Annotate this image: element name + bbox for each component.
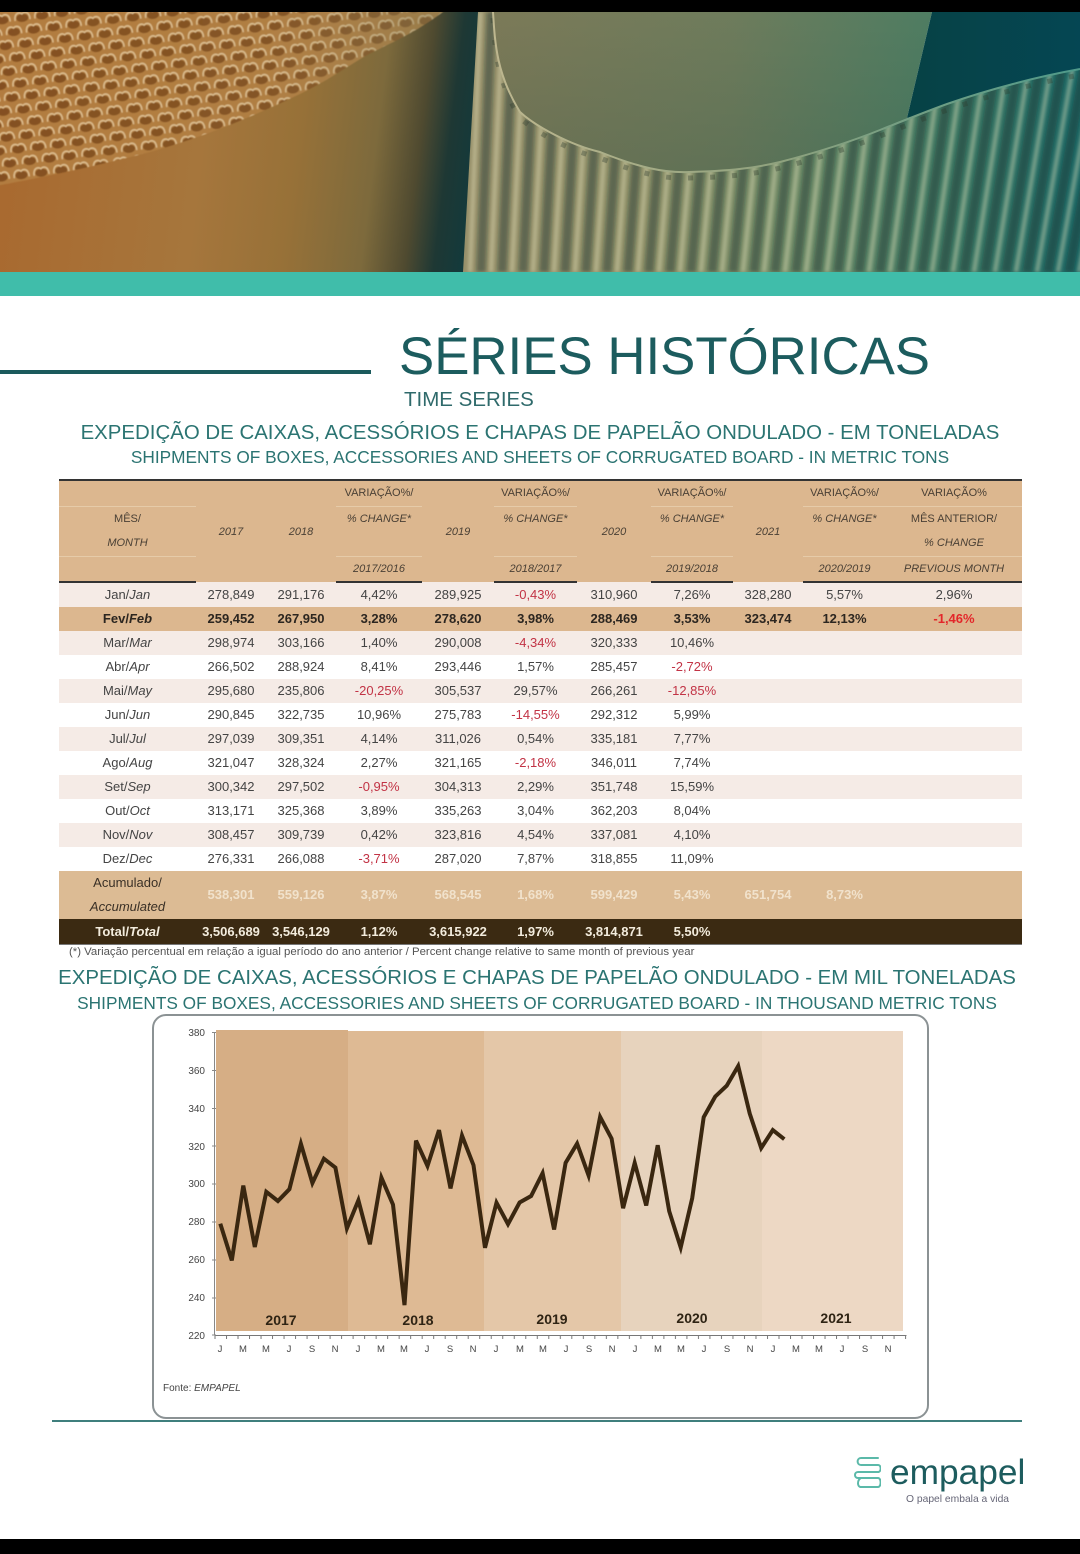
row: June: 292,312: [590, 707, 638, 722]
row: December: 287,020: [434, 851, 482, 866]
data table: VARIAÇÃO%/: [658, 487, 726, 499]
x axis labels: M: [400, 1344, 408, 1355]
row: May: 235,806: [278, 683, 324, 698]
footer rule: [52, 1420, 1022, 1422]
row: September: 15,59%: [670, 779, 714, 794]
title: SÉRIES HISTÓRICAS: [399, 327, 930, 386]
data table: [59, 479, 1022, 945]
x axis labels: M: [516, 1344, 524, 1355]
data table: MONTH: [107, 537, 148, 549]
data table: 2020: [602, 526, 626, 538]
row: October: [105, 803, 710, 818]
row: accumulated: Acumulado/: [93, 875, 162, 890]
y axis labels: 320: [188, 1142, 205, 1153]
row: July: 0,54%: [517, 731, 554, 746]
row: August: -2,18%: [515, 755, 556, 770]
x axis labels: S: [447, 1344, 453, 1355]
flute edge: [493, 12, 1080, 172]
data table: MÊS ANTERIOR/: [911, 513, 997, 525]
row: November: 0,42%: [361, 827, 397, 842]
row: May: 29,57%: [513, 683, 558, 698]
row: June: 290,845: [208, 707, 254, 722]
row: August: 7,74%: [674, 755, 710, 770]
row: July: 4,14%: [361, 731, 397, 746]
row: February highlighted: Fev/Feb: [103, 611, 152, 626]
row: accumulated: 5,43%: [674, 887, 710, 902]
data table: % CHANGE*: [347, 513, 411, 525]
row: September: 2,29%: [517, 779, 554, 794]
x axis labels: M: [239, 1344, 247, 1355]
data table: VARIAÇÃO%: [921, 487, 987, 499]
row: April: 1,57%: [517, 659, 554, 674]
row: May: 266,261: [590, 683, 638, 698]
x axis labels: N: [609, 1344, 616, 1355]
data line: [220, 1066, 784, 1305]
row: March: 320,333: [590, 635, 638, 650]
row: January: Jan/Jan: [105, 587, 150, 602]
left cardboard roll: [0, 12, 482, 272]
x axis labels: J: [564, 1344, 569, 1355]
row: October: Out/Oct: [105, 803, 150, 818]
row: January: 289,925: [434, 586, 482, 602]
row: December: Dez/Dec: [103, 851, 152, 866]
row: December: 276,331: [208, 851, 254, 866]
row: June: 322,735: [278, 707, 324, 722]
row: July: 297,039: [208, 731, 254, 746]
year labels: 2017: [265, 1312, 297, 1328]
chart frame: [152, 1014, 929, 1419]
row: September: Set/Sep: [104, 779, 151, 794]
data table: 2019/2018: [666, 563, 718, 575]
row: total: 1,97%: [517, 924, 554, 938]
data table: % CHANGE*: [660, 513, 724, 525]
row: May: 305,537: [434, 683, 482, 698]
row: accumulated: 8,73%: [826, 887, 863, 902]
logo tagline: O papel embala a vida: [906, 1494, 1009, 1505]
row: November: 309,739: [278, 827, 324, 842]
row: October: 313,171: [208, 803, 254, 818]
olive inner board: [470, 12, 1080, 272]
row: June: 5,99%: [674, 707, 710, 722]
row: February highlighted: 3,98%: [517, 611, 554, 626]
top black bar: [0, 0, 1080, 12]
row: October: 8,04%: [674, 803, 710, 818]
flute notches: [493, 18, 1080, 178]
year labels: 2020: [676, 1310, 708, 1326]
x axis labels: J: [771, 1344, 776, 1355]
row: September: -0,95%: [358, 779, 400, 794]
dark teal backdrop: [907, 12, 1080, 118]
x axis labels: J: [494, 1344, 499, 1355]
header photo: corrugated cardboard: [0, 12, 1080, 272]
row: March: 298,974: [208, 635, 254, 650]
x axis labels: M: [377, 1344, 385, 1355]
row: November: 4,10%: [674, 827, 710, 842]
row: March: 290,008: [434, 635, 482, 650]
row: January: 278,849: [208, 586, 254, 602]
x axis labels: J: [840, 1344, 845, 1355]
row: August: [102, 755, 710, 770]
data table: VARIAÇÃO%/: [810, 487, 879, 499]
row: November: 308,457: [208, 827, 254, 842]
row: August: 321,165: [434, 755, 482, 770]
data table: 2017: [219, 526, 243, 538]
row: February highlighted: 323,474: [744, 611, 792, 626]
x axis labels: M: [677, 1344, 685, 1355]
row: November: 323,816: [434, 827, 482, 842]
x axis labels: N: [470, 1344, 477, 1355]
data table: PREVIOUS MONTH: [904, 563, 1004, 575]
row: January: 310,960: [590, 586, 638, 602]
row: June: -14,55%: [511, 707, 560, 722]
row: January: 4,42%: [361, 587, 397, 602]
row: accumulated: 538,301: [208, 887, 254, 902]
row: October: 335,263: [434, 803, 482, 818]
row: June: Jun/Jun: [105, 707, 150, 722]
row: February highlighted: 3,28%: [361, 611, 397, 626]
row: total: 3,814,871: [585, 924, 643, 938]
x axis labels: M: [792, 1344, 800, 1355]
axes: [212, 1032, 906, 1339]
corrugated flutes: [460, 12, 1080, 272]
x axis labels: M: [262, 1344, 270, 1355]
data table: % CHANGE*: [503, 513, 568, 525]
bottom black bar: [0, 1539, 1080, 1554]
row: February highlighted: 267,950: [278, 611, 324, 626]
x axis labels: [218, 1344, 892, 1355]
flute shadows: [481, 12, 1080, 272]
row: May: 295,680: [208, 683, 254, 698]
y axis labels: 300: [188, 1179, 205, 1190]
row: November: 337,081: [590, 827, 638, 842]
row: October: 325,368: [278, 803, 324, 818]
row: June: 275,783: [434, 707, 482, 722]
table heading English: SHIPMENTS OF BOXES, ACCESSORIES AND SHEETS OF CORRUGATED BOARD - IN METRIC TONS: [131, 447, 949, 467]
row: February highlighted: 278,620: [434, 611, 482, 626]
row: March: 1,40%: [361, 635, 397, 650]
data table: % CHANGE: [924, 537, 984, 549]
flute highlights: [470, 12, 1080, 272]
data table: MÊS/: [114, 513, 141, 525]
row: March: 10,46%: [670, 635, 714, 650]
row: February highlighted: 288,469: [590, 611, 638, 626]
row: total: 5,50%: [674, 924, 710, 938]
row: May: Mai/May: [103, 683, 152, 698]
x axis labels: M: [539, 1344, 547, 1355]
x axis labels: S: [586, 1344, 592, 1355]
row: January: [59, 582, 1022, 607]
row: total: 3,506,689: [202, 924, 260, 938]
row: April: 285,457: [590, 659, 638, 674]
y axis labels: 280: [188, 1217, 205, 1228]
row: December: [103, 851, 714, 866]
data table: 2017/2016: [353, 563, 405, 575]
row: October: 362,203: [590, 803, 638, 818]
logo wordmark: empapel: [890, 1453, 1025, 1492]
row: September: 297,502: [278, 779, 324, 794]
row: March: [59, 631, 1022, 655]
row: April: 266,502: [208, 659, 254, 674]
data table: 2018/2017: [510, 563, 562, 575]
row: April: [105, 659, 713, 674]
year labels: [265, 1310, 852, 1328]
x axis labels: J: [425, 1344, 430, 1355]
row: January: 2,96%: [936, 587, 972, 602]
footnote: (*) Variação percentual em relação a igual período do ano anterior / Percent change relative to same month of previous year: [69, 946, 694, 958]
row: January: 291,176: [278, 586, 324, 602]
row: August: 328,324: [278, 755, 324, 770]
row: August: Ago/Aug: [103, 755, 152, 770]
x axis labels: J: [702, 1344, 707, 1355]
row: total: 1,12%: [361, 924, 397, 938]
year labels: 2018: [402, 1312, 434, 1328]
row: March: 303,166: [278, 635, 324, 650]
row: January: 5,57%: [826, 587, 863, 602]
x axis labels: J: [356, 1344, 361, 1355]
row: January: 7,26%: [674, 587, 710, 602]
row: April: 293,446: [434, 659, 482, 674]
row: accumulated: 559,126: [278, 887, 324, 902]
chart heading Portuguese: EXPEDIÇÃO DE CAIXAS, ACESSÓRIOS E CHAPAS DE PAPELÃO ONDULADO - EM MIL TONELADAS: [58, 967, 1016, 989]
year labels: 2019: [536, 1311, 568, 1327]
row: total: 3,546,129: [272, 924, 330, 938]
row: December: -3,71%: [358, 851, 400, 866]
row: May: -12,85%: [668, 683, 716, 698]
y axis labels: 340: [188, 1104, 205, 1115]
y axis labels: 260: [188, 1255, 205, 1266]
row: December: 11,09%: [670, 851, 714, 866]
row: January: 328,280: [744, 586, 792, 602]
x axis labels: N: [747, 1344, 754, 1355]
title rule: [0, 370, 371, 374]
x axis labels: S: [309, 1344, 315, 1355]
row: June: 10,96%: [357, 707, 401, 722]
row: February highlighted: -1,46%: [933, 611, 975, 626]
row: April: 8,41%: [361, 659, 397, 674]
row: December: 266,088: [278, 851, 324, 866]
data table: VARIAÇÃO%/: [345, 487, 413, 499]
row: February highlighted: 12,13%: [822, 611, 867, 626]
row: July: Jul/Jul: [109, 731, 146, 746]
subtitle: TIME SERIES: [404, 388, 534, 411]
row: April: Abr/Apr: [105, 659, 150, 674]
y axis labels: [188, 1028, 205, 1342]
row: July: 311,026: [435, 731, 481, 746]
row: September: 300,342: [208, 779, 254, 794]
row: July: 335,181: [590, 731, 638, 746]
row: September: 351,748: [590, 779, 638, 794]
row: accumulated: 3,87%: [361, 887, 397, 902]
row: March: -4,34%: [515, 635, 556, 650]
row: December: 7,87%: [517, 851, 554, 866]
row: August: 321,047: [208, 755, 254, 770]
row: April: -2,72%: [671, 659, 713, 674]
x axis labels: M: [815, 1344, 823, 1355]
row: October: 3,04%: [517, 803, 554, 818]
row: February highlighted: 3,53%: [674, 611, 710, 626]
row: September: [59, 775, 1022, 799]
row: May: -20,25%: [355, 683, 403, 698]
row: July: 309,351: [278, 731, 324, 746]
row: accumulated: 651,754: [744, 887, 792, 902]
x axis labels: N: [885, 1344, 892, 1355]
row: April: 288,924: [278, 659, 324, 674]
row: October: 3,89%: [361, 803, 397, 818]
row: November: [59, 823, 1022, 847]
row: accumulated: [59, 871, 1022, 919]
y axis labels: 240: [188, 1293, 205, 1304]
y axis labels: 220: [188, 1331, 205, 1342]
row: January: -0,43%: [515, 587, 556, 602]
data table: 2021: [756, 526, 780, 538]
row: December: 318,855: [590, 851, 638, 866]
row: February highlighted: [59, 607, 1022, 631]
row: accumulated: Accumulated: [90, 899, 165, 914]
year labels: 2021: [820, 1310, 852, 1326]
x axis labels: J: [287, 1344, 292, 1355]
row: November: Nov/Nov: [103, 827, 152, 842]
row: June: [105, 707, 710, 722]
chart heading English: SHIPMENTS OF BOXES, ACCESSORIES AND SHEETS OF CORRUGATED BOARD - IN THOUSAND METRIC TONS: [77, 993, 997, 1013]
row: accumulated: 568,545: [434, 887, 482, 902]
data table: 2019: [446, 526, 470, 538]
y axis labels: 380: [188, 1028, 205, 1039]
row: February highlighted: 259,452: [208, 611, 254, 626]
row: accumulated: 599,429: [590, 887, 638, 902]
line chart: [163, 1028, 906, 1394]
teal band: [0, 272, 1080, 296]
logo: [854, 1453, 1025, 1505]
row: September: 304,313: [434, 779, 482, 794]
year bands: [216, 1030, 903, 1331]
x axis labels: N: [332, 1344, 339, 1355]
row: May: [59, 679, 1022, 703]
data table: % CHANGE*: [812, 513, 877, 525]
table heading Portuguese: EXPEDIÇÃO DE CAIXAS, ACESSÓRIOS E CHAPAS DE PAPELÃO ONDULADO - EM TONELADAS: [81, 422, 999, 444]
row: March: Mar/Mar: [103, 635, 152, 650]
source note: Fonte: EMPAPEL: [163, 1383, 241, 1394]
row: total: 3,615,922: [429, 924, 487, 938]
data table: 2020/2019: [818, 563, 870, 575]
data table: VARIAÇÃO%/: [501, 487, 570, 499]
row: total: Total/Total: [95, 924, 160, 938]
row: total: [59, 919, 1022, 944]
x axis labels: M: [654, 1344, 662, 1355]
data table: 2018: [289, 526, 313, 538]
row: August: 2,27%: [361, 755, 397, 770]
row: July: [59, 727, 1022, 751]
x axis labels: J: [633, 1344, 638, 1355]
x axis labels: S: [724, 1344, 730, 1355]
row: accumulated: 1,68%: [517, 887, 554, 902]
x axis labels: J: [218, 1344, 223, 1355]
row: July: 7,77%: [674, 731, 710, 746]
x axis labels: S: [862, 1344, 868, 1355]
logo icon: [854, 1457, 881, 1488]
row: November: 4,54%: [517, 827, 554, 842]
row: August: 346,011: [591, 755, 637, 770]
honeycomb flutes: [0, 0, 458, 187]
y axis labels: 360: [188, 1066, 205, 1077]
